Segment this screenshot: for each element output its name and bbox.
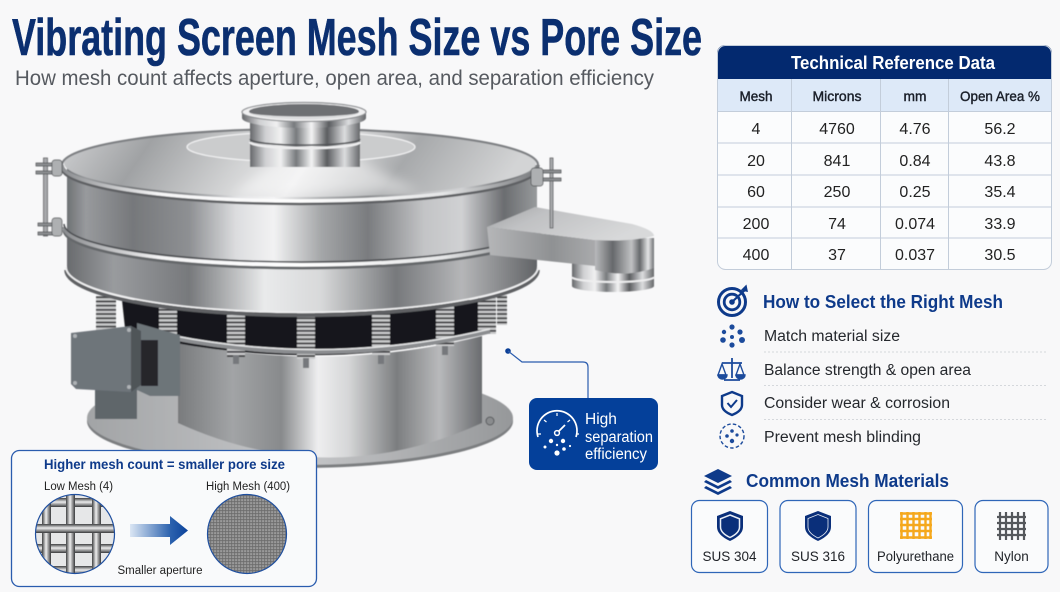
icon: layers: [704, 469, 732, 495]
heading: Common Mesh Materials: [746, 471, 949, 491]
material: nylon: [975, 500, 1048, 572]
discharge spout: [487, 207, 654, 292]
callout text: High: [585, 411, 617, 428]
right clamp: [531, 158, 561, 228]
vibrating screen machine: [36, 102, 654, 468]
item: prevent mesh blinding: Prevent mesh blinding: [764, 429, 921, 446]
item: balance strength: Balance strength & open area: [764, 362, 971, 379]
table rows: 0.84: [899, 153, 931, 170]
table title: Technical Reference Data: [791, 53, 996, 73]
leader line: [505, 348, 588, 398]
upper body section: [67, 165, 537, 264]
table rows: 35.4: [984, 184, 1016, 201]
material: nylon: Nylon: [994, 549, 1029, 564]
item: wear and corrosion: Consider wear & corrosion: [764, 395, 950, 412]
junction box: [71, 323, 180, 419]
material: polyurethane: [868, 500, 962, 572]
left clamp: [36, 158, 62, 236]
callout text: efficiency: [585, 446, 647, 463]
high mesh swatch: [208, 494, 286, 574]
table rows: 400: [743, 247, 769, 264]
section: common mesh materials: [692, 469, 1048, 572]
table rows: 33.9: [984, 216, 1016, 233]
table column headers: Microns: [812, 88, 862, 104]
arm top: [487, 207, 654, 240]
middle clamp band: [64, 230, 540, 268]
table rows: 43.8: [984, 153, 1016, 170]
lower drum: [178, 336, 482, 458]
icon: target: [718, 286, 747, 316]
high mesh label: High Mesh (400): [206, 481, 290, 493]
table column headers: Open Area %: [960, 88, 1040, 104]
icon: gauge with particles: [537, 411, 579, 456]
table rows: 30.5: [984, 247, 1016, 264]
spring bolts: [233, 346, 448, 368]
arm front: [487, 227, 595, 266]
lid: [64, 129, 536, 197]
title: Vibrating Screen Mesh Size vs Pore Size: [12, 9, 702, 67]
callout text: [585, 411, 653, 463]
arrow: [130, 516, 188, 545]
material: SUS 304: SUS 304: [702, 549, 757, 564]
heading: How to Select the Right Mesh: [763, 292, 1003, 312]
support ring: [170, 331, 490, 352]
table column header background: [717, 79, 1052, 112]
icon: balance scale: [718, 358, 745, 380]
callout text: separation: [585, 429, 653, 446]
material: polyurethane: Polyurethane: [877, 549, 954, 564]
table: technical reference data: [717, 45, 1052, 270]
material: SUS 316: [780, 500, 856, 572]
lid reflection: [230, 150, 420, 196]
cylinder end: [595, 238, 654, 274]
low mesh swatch: [36, 494, 114, 575]
table rows: 37: [828, 247, 846, 264]
table rows: 56.2: [984, 121, 1016, 138]
table rows: 0.074: [895, 216, 935, 233]
icon: particles: [720, 324, 745, 348]
table rows: 20: [747, 153, 765, 170]
table title bar: [717, 45, 1052, 79]
springs: [96, 295, 507, 359]
table rows: 200: [743, 216, 769, 233]
low mesh label: Low Mesh (4): [44, 481, 113, 493]
caption: Smaller aperture: [118, 565, 202, 577]
table rows: 250: [824, 184, 850, 201]
table grid: [717, 46, 1052, 270]
lower body section: [67, 222, 537, 312]
panel: mesh comparison: [12, 450, 316, 586]
section: how to select the right mesh: [718, 286, 1048, 448]
base flange: [87, 371, 513, 468]
table rows: [743, 121, 1016, 264]
panel heading: Higher mesh count = smaller pore size: [44, 457, 285, 472]
inlet neck: [242, 102, 366, 167]
lid rim: [62, 129, 538, 204]
material: SUS 316: SUS 316: [791, 549, 845, 564]
outlet: [572, 262, 654, 292]
spring cavity: [122, 300, 484, 355]
table rows: 74: [828, 216, 846, 233]
icon: blinding circle: [720, 424, 744, 448]
material: SUS 304: [692, 500, 768, 572]
icon: shield check: [722, 392, 742, 415]
table rows: 60: [747, 184, 765, 201]
table rows: 4: [752, 121, 761, 138]
table column headers: [740, 88, 1040, 104]
table rows: 4.76: [899, 121, 931, 138]
table column headers: Mesh: [740, 88, 772, 104]
table rows: 841: [824, 153, 850, 170]
item: match material size: Match material size: [764, 328, 900, 345]
table rows: 4760: [819, 121, 855, 138]
table rows: 0.25: [899, 184, 931, 201]
callout: high separation efficiency: [505, 348, 658, 470]
table column headers: mm: [904, 88, 926, 104]
subtitle: How mesh count affects aperture, open area, and separation efficiency: [15, 66, 654, 90]
table rows: 0.037: [895, 247, 935, 264]
lid crown: [187, 132, 415, 162]
